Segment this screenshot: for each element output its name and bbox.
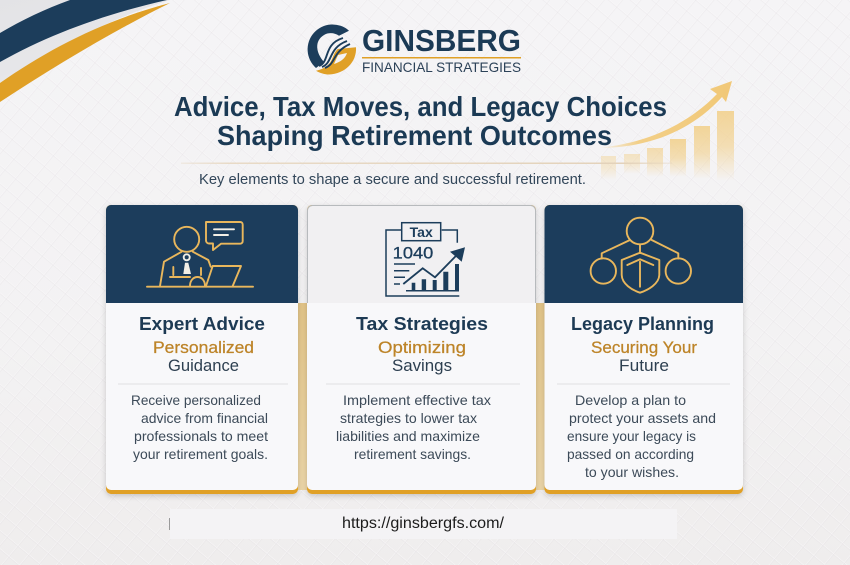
icon: tax form with rising chart (386, 223, 465, 296)
icon: tax form with rising chart: Tax (410, 224, 433, 240)
title (174, 91, 667, 151)
description: professionals to meet (134, 428, 268, 444)
icon: tax form with rising chart: 1040 (393, 243, 433, 262)
growth chart decoration (598, 81, 734, 181)
description: strategies to lower tax (340, 410, 477, 426)
description: retirement savings. (354, 446, 471, 462)
heading: Legacy Planning (571, 313, 714, 334)
company name: GINSBERG (362, 23, 521, 58)
card connector strips (296, 303, 547, 490)
panel: legacy planning (544, 205, 743, 494)
title: Advice, Tax Moves, and Legacy Choices (174, 91, 667, 122)
subheading (378, 339, 466, 375)
description: Implement effective tax (343, 392, 491, 408)
subtitle: Key elements to shape a secure and successful retirement. (199, 171, 586, 188)
panel: tax strategies (307, 205, 536, 494)
description: Receive personalized (131, 392, 261, 408)
description: passed on according (567, 446, 694, 462)
card body (307, 205, 536, 494)
logo mark (308, 24, 356, 74)
description: advice from financial (141, 410, 268, 426)
heading: Expert Advice (139, 313, 265, 334)
corner swooshes (0, 0, 170, 102)
panel: expert advice (106, 205, 298, 494)
description: your retirement goals. (133, 446, 268, 462)
subheading (153, 339, 254, 375)
logo (308, 23, 521, 75)
company tagline: FINANCIAL STRATEGIES (362, 59, 521, 75)
card body (544, 205, 743, 494)
description: liabilities and maximize (336, 428, 480, 444)
description (567, 392, 716, 480)
subheading: Securing Your (591, 339, 698, 357)
description (336, 392, 491, 462)
icon: family tree with shield (591, 218, 691, 293)
description: protect your assets and (569, 410, 716, 426)
title: Shaping Retirement Outcomes (217, 120, 612, 151)
subheading: Personalized (153, 339, 254, 357)
subheading: Guidance (168, 357, 239, 375)
icon: advisor at laptop (147, 222, 253, 287)
description (131, 392, 268, 462)
heading: Tax Strategies (356, 313, 488, 334)
subheading: Optimizing (378, 339, 466, 357)
description: to your wishes. (585, 464, 679, 480)
card body (106, 205, 298, 494)
subheading (591, 339, 698, 375)
subheading: Savings (392, 357, 452, 375)
subheading: Future (619, 357, 669, 375)
website url bar: https://ginsbergfs.com/ (342, 515, 505, 532)
description: Develop a plan to (575, 392, 686, 408)
website url bar (169, 509, 677, 539)
description: ensure your legacy is (567, 428, 696, 444)
